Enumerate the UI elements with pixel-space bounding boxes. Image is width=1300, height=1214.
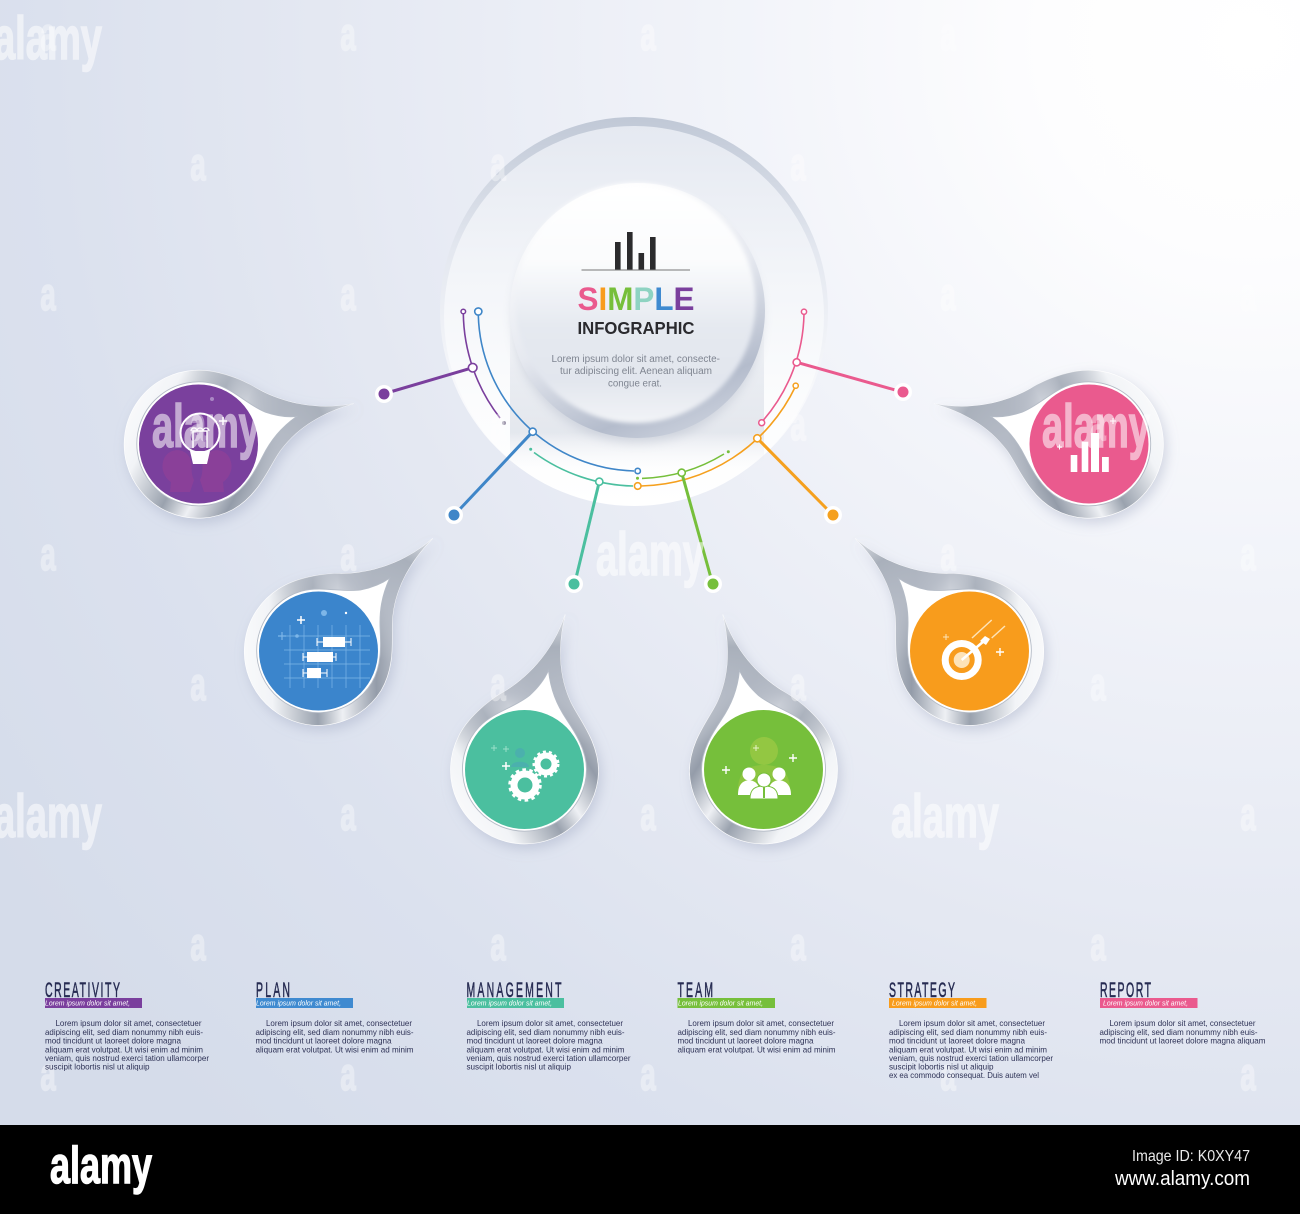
- tag text: Lorem ipsum dolor sit amet,: [256, 998, 341, 1008]
- body text: veniam, quis nostrud exerci tation ullamcorper: [889, 1053, 1053, 1063]
- watermark: small letters: a: [340, 790, 356, 841]
- body text: mod tincidunt ut laoreet dolore magna aliquam: [1100, 1036, 1266, 1046]
- image id: Image ID: K0XY47: [1132, 1148, 1250, 1165]
- tag text: Lorem ipsum dolor sit amet,: [467, 998, 552, 1008]
- watermark: small letters: a: [790, 920, 806, 971]
- body text: mod tincidunt ut laoreet dolore magna: [256, 1036, 392, 1046]
- panel: plan: [256, 978, 414, 1054]
- watermark: small letters: a: [790, 140, 806, 191]
- body text: suscipit lobortis nisl ut aliquip: [889, 1062, 994, 1072]
- subtitle: INFOGRAPHIC: INFOGRAPHIC: [578, 318, 695, 338]
- connector: team green: [636, 450, 730, 593]
- icon: bar chart: [582, 232, 690, 270]
- tag text: Lorem ipsum dolor sit amet,: [892, 998, 977, 1008]
- body text: suscipit lobortis nisl ut aliquip: [466, 1062, 571, 1072]
- title: SIMPLE: SIMPLE: [578, 281, 694, 317]
- body text: adipiscing elit, sed diam nonummy nibh euis-: [1100, 1027, 1258, 1037]
- tag bar: [678, 998, 775, 1008]
- watermark: small letters: a: [940, 1050, 956, 1101]
- panel: management: [466, 978, 631, 1072]
- watermark: small letters: a: [40, 530, 56, 581]
- heading: STRATEGY: [889, 978, 955, 1002]
- watermark: small letters: a: [190, 660, 206, 711]
- panel: report: [1100, 978, 1266, 1046]
- watermark: large logos: alamy: [596, 521, 704, 588]
- watermark: large logos: alamy: [1042, 393, 1150, 460]
- icon: gears: [491, 745, 558, 800]
- tag bar: [1100, 998, 1198, 1008]
- body text: adipiscing elit, sed diam nonummy nibh euis-: [466, 1027, 625, 1037]
- body text: [889, 1018, 1053, 1080]
- connector: management teal: [529, 448, 633, 593]
- body text: aliquam erat volutpat. Ut wisi enim ad minim: [256, 1044, 414, 1054]
- watermark: small letters: a: [490, 140, 506, 191]
- body text: aliquam erat volutpat. Ut wisi enim ad minim: [466, 1044, 624, 1054]
- connector: strategy orange: [634, 383, 842, 524]
- drop: creativity: [97, 304, 370, 545]
- body text: [466, 1018, 631, 1072]
- tag bar: [889, 998, 986, 1008]
- watermark: small letters: a: [1090, 660, 1106, 711]
- watermark: small letters: a: [490, 400, 506, 451]
- heading: REPORT: [1100, 978, 1151, 1002]
- watermark: large logos: [0, 5, 1150, 850]
- watermark: small letters: a: [190, 140, 206, 191]
- body text: ex ea commodo consequat. Duis autem vel: [889, 1070, 1039, 1080]
- drop: team: [690, 614, 837, 844]
- body text: adipiscing elit, sed diam nonummy nibh euis-: [45, 1027, 203, 1037]
- body text: Lorem ipsum dolor sit amet, consectetuer: [899, 1018, 1045, 1028]
- central hub: [440, 117, 828, 506]
- footer bar: [0, 1125, 1300, 1214]
- watermark: small letters: a: [190, 920, 206, 971]
- heading: TEAM: [678, 978, 713, 1002]
- watermark: small letters: a: [1240, 790, 1256, 841]
- body text: veniam, quis nostrud exerci tation ullamcorper: [45, 1053, 209, 1063]
- tag text: Lorem ipsum dolor sit amet,: [1103, 998, 1188, 1008]
- website: www.alamy.com: [1114, 1168, 1250, 1190]
- connector: plan blue: [445, 308, 640, 524]
- watermark: small letters: a: [640, 790, 656, 841]
- description: congue erat.: [608, 378, 662, 390]
- icon: team of people: [722, 737, 797, 799]
- watermark: small letters: a: [340, 270, 356, 321]
- central sphere: [510, 183, 765, 443]
- body text: Lorem ipsum dolor sit amet, consectetuer: [688, 1018, 834, 1028]
- body text: [678, 1018, 836, 1054]
- watermark: small letters: a: [40, 270, 56, 321]
- watermark: small letters: a: [340, 1050, 356, 1101]
- body text: adipiscing elit, sed diam nonummy nibh euis-: [678, 1027, 836, 1037]
- body text: Lorem ipsum dolor sit amet, consectetuer: [266, 1018, 412, 1028]
- watermark: small letters: a: [1240, 270, 1256, 321]
- body text: aliquam erat volutpat. Ut wisi enim ad minim: [678, 1044, 836, 1054]
- icon: gantt chart: [278, 610, 370, 688]
- drop: strategy: [827, 480, 1071, 753]
- watermark: small letters: a: [640, 10, 656, 61]
- body text: mod tincidunt ut laoreet dolore magna: [678, 1036, 814, 1046]
- heading: PLAN: [256, 978, 290, 1002]
- body text: mod tincidunt ut laoreet dolore magna: [45, 1036, 181, 1046]
- watermark: small letters: a: [1090, 920, 1106, 971]
- drop: management: [451, 614, 598, 844]
- watermark: small letters: a: [940, 270, 956, 321]
- tag bar: [45, 998, 142, 1008]
- icon: report bars: [1057, 418, 1116, 472]
- tag bar: [256, 998, 353, 1008]
- watermark: small letters: a: [1090, 400, 1106, 451]
- tag bar: [467, 998, 564, 1008]
- watermark: small letters: a: [940, 530, 956, 581]
- body text: suscipit lobortis nisl ut aliquip: [45, 1062, 150, 1072]
- heading: CREATIVITY: [45, 978, 120, 1002]
- drop: report: [918, 304, 1190, 545]
- watermark: small letters: a: [190, 400, 206, 451]
- body text: mod tincidunt ut laoreet dolore magna: [889, 1036, 1025, 1046]
- body text: Lorem ipsum dolor sit amet, consectetuer: [56, 1018, 202, 1028]
- watermark: small letters: a: [340, 10, 356, 61]
- body text: veniam, quis nostrud exerci tation ullamcorper: [466, 1053, 631, 1063]
- description: tur adipiscing elit. Aenean aliquam: [560, 366, 712, 377]
- sphere column shadow: [510, 320, 764, 470]
- body text: aliquam erat volutpat. Ut wisi enim ad minim: [45, 1044, 203, 1054]
- watermark: small letters: a: [490, 920, 506, 971]
- watermark: small letters: a: [1240, 1050, 1256, 1101]
- heading: MANAGEMENT: [466, 978, 562, 1002]
- body text: [1100, 1018, 1266, 1046]
- panel: creativity: [45, 978, 209, 1072]
- watermark: small letters: a: [640, 1050, 656, 1101]
- body text: aliquam erat volutpat. Ut wisi enim ad minim: [889, 1044, 1047, 1054]
- body text: [45, 1018, 209, 1072]
- panel: strategy: [889, 978, 1053, 1080]
- watermark: small letters: a: [1240, 530, 1256, 581]
- watermark: small letters: a: [1090, 140, 1106, 191]
- description: [552, 354, 720, 390]
- body text: [256, 1018, 414, 1054]
- tag text: Lorem ipsum dolor sit amet,: [45, 998, 130, 1008]
- outer glass ring: [440, 117, 828, 506]
- body text: Lorem ipsum dolor sit amet, consectetuer: [477, 1018, 623, 1028]
- watermark: small letters: a: [940, 10, 956, 61]
- watermark: small letters: a: [340, 530, 356, 581]
- watermark: small letters: a: [790, 660, 806, 711]
- watermark: small letters: a: [40, 1050, 56, 1101]
- body text: Lorem ipsum dolor sit amet, consectetuer: [1110, 1018, 1256, 1028]
- watermark: small letters: a: [790, 400, 806, 451]
- body text: adipiscing elit, sed diam nonummy nibh euis-: [256, 1027, 414, 1037]
- watermark: small letters: a: [1240, 10, 1256, 61]
- description: Lorem ipsum dolor sit amet, consecte-: [552, 354, 720, 365]
- body text: mod tincidunt ut laoreet dolore magna: [466, 1036, 603, 1046]
- connector: creativity purple: [375, 309, 506, 425]
- body text: adipiscing elit, sed diam nonummy nibh euis-: [889, 1027, 1047, 1037]
- tag text: Lorem ipsum dolor sit amet,: [678, 998, 763, 1008]
- icon: target and arrow: [943, 620, 1005, 676]
- icon: lightbulb with heads: [162, 397, 232, 492]
- watermark: large logos: alamy: [891, 783, 999, 850]
- drop: plan: [217, 480, 461, 753]
- footer logo: alamy: [50, 1137, 152, 1195]
- watermark: large logos: alamy: [152, 393, 260, 460]
- panel: team: [678, 978, 836, 1054]
- watermark: small letters: a: [40, 10, 56, 61]
- watermark: small letters: a: [490, 660, 506, 711]
- connector: report pink: [759, 309, 912, 426]
